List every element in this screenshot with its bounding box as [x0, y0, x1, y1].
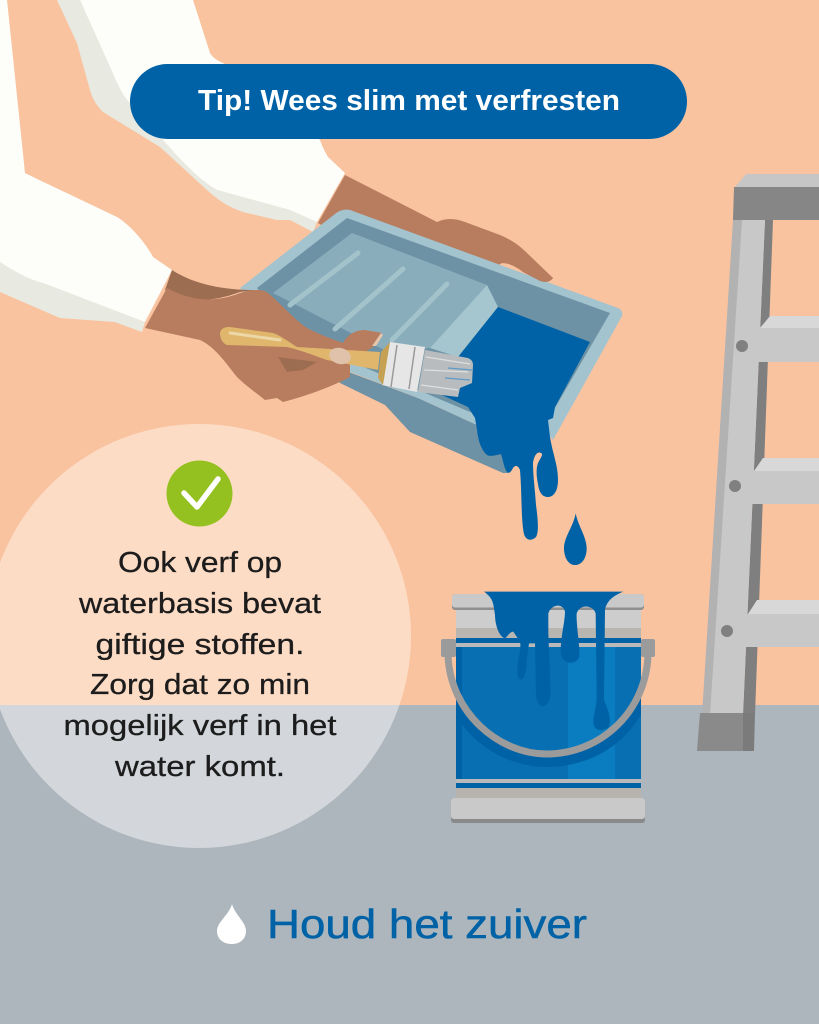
paint brush	[220, 327, 473, 397]
icon: green check mark	[166, 460, 232, 526]
thumb nail	[327, 345, 353, 367]
brush handle highlight	[230, 333, 280, 340]
left wrist shadow	[165, 270, 255, 300]
bucket blue label	[447, 647, 649, 779]
ladder rail front	[710, 220, 765, 715]
paint bucket	[441, 592, 655, 823]
text block: tip message: mogelijk verf in het	[64, 710, 336, 742]
text block: tip message: giftige stoffen.	[96, 629, 304, 661]
left sleeve white	[0, 0, 172, 322]
ladder	[697, 174, 819, 751]
text block: tip message: Ook verf op	[118, 547, 282, 579]
paint pool and drips from tray	[442, 307, 590, 540]
left hand holding brush	[145, 270, 383, 402]
brush bristles	[418, 350, 473, 397]
text block: tip message: water komt.	[114, 751, 285, 783]
icon: white water drop	[217, 904, 246, 944]
title banner: Tip! Wees slim met verfresten	[198, 85, 620, 117]
panel: tip circle	[0, 424, 411, 848]
tray sloped well	[430, 285, 498, 357]
left hand finger shadow	[278, 357, 317, 372]
ladder foot	[697, 713, 755, 751]
right arm with sleeve	[57, 0, 553, 300]
ladder rung 1	[748, 316, 819, 362]
fingernail	[372, 333, 383, 346]
tray ribbed floor	[273, 233, 487, 352]
brush ferrule	[378, 342, 425, 392]
ladder rail side shadow	[743, 220, 773, 715]
footer logo: Houd het zuiver	[267, 901, 587, 947]
text block: tip message	[64, 547, 336, 783]
paint dripping over bucket	[484, 592, 623, 730]
text block: tip message: waterbasis bevat	[78, 588, 321, 620]
left sleeve	[0, 0, 172, 332]
left hand	[145, 288, 382, 402]
left sleeve shadow	[0, 262, 145, 332]
text block: tip message: Zorg dat zo min	[90, 669, 310, 701]
ladder top cap	[733, 174, 819, 220]
bucket handle	[441, 639, 655, 754]
paint tray	[240, 210, 622, 473]
right sleeve shadow	[57, 0, 317, 232]
circle lower part over floor	[0, 705, 400, 848]
floor background	[0, 705, 819, 1024]
ladder rail left strip	[702, 220, 743, 715]
circle upper part over wall	[0, 424, 411, 705]
fingertip over tray rim	[502, 258, 553, 282]
bucket lid rim	[452, 594, 644, 610]
brush handle	[220, 327, 380, 370]
ladder rung 2	[742, 458, 819, 504]
falling paint drop	[564, 513, 587, 565]
bucket base rim	[451, 798, 645, 823]
title banner	[130, 64, 687, 139]
bucket lower body	[456, 779, 641, 798]
bucket upper body	[456, 610, 641, 647]
tray underside	[330, 365, 508, 473]
tray inner wall	[257, 218, 610, 420]
tray outer rim	[240, 210, 622, 440]
right forearm and hand	[318, 175, 553, 300]
ladder bolts	[721, 340, 748, 637]
ladder rung 3	[735, 600, 819, 647]
right sleeve	[80, 0, 345, 222]
tray ridges	[290, 253, 447, 340]
wall background	[0, 0, 819, 705]
